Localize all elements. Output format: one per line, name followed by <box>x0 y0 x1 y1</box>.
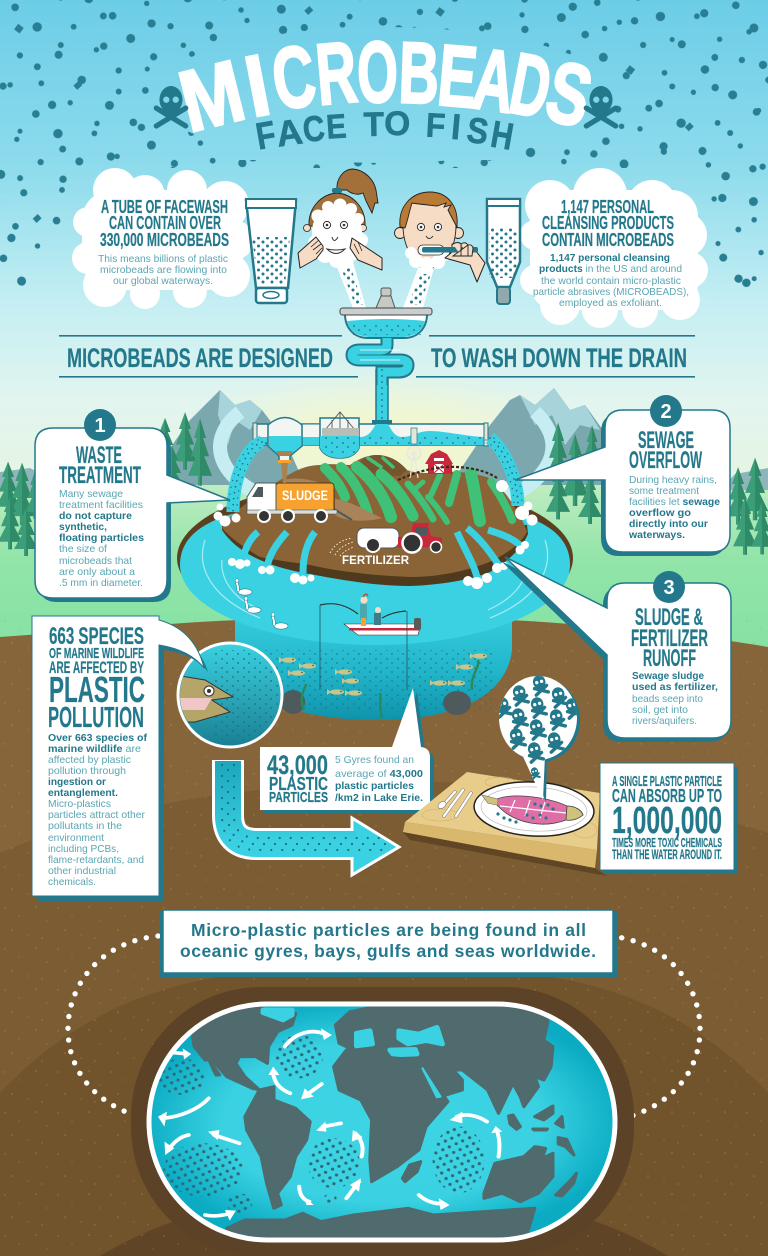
icon: facewash tube left <box>246 199 296 303</box>
panel: waste treatment: 1 <box>94 415 106 437</box>
text: personal cleansing products: 1,147 PERSONAL <box>561 197 654 217</box>
panel: waste treatment: do not capture <box>59 510 132 522</box>
panel: waste treatment: treatment facilities <box>59 499 143 511</box>
text: tube of facewash: CAN CONTAIN OVER <box>109 213 221 233</box>
title: MICROBEADS: I <box>237 36 277 136</box>
panel: waste treatment: .5 mm in diameter. <box>59 577 143 589</box>
text: personal cleansing products: products in the US and around <box>539 263 682 275</box>
text: personal cleansing products: CONTAIN MICROBEADS <box>542 230 674 250</box>
panel: 663 species: including PCBs, <box>48 843 119 855</box>
panel: sewage overflow: waterways. <box>628 529 685 541</box>
text: personal cleansing products <box>533 197 689 309</box>
panel: sewage overflow: OVERFLOW <box>629 447 702 474</box>
land masses <box>192 1007 576 1238</box>
text: tube of facewash: our global waterways. <box>113 275 213 287</box>
panel: sludge and fertilizer runoff: 3 <box>663 577 675 599</box>
text: tube of facewash: This means billions of plastic <box>98 253 228 265</box>
panel: waste treatment: synthetic, <box>59 521 107 533</box>
panel: 663 species: ARE AFFECTED BY <box>49 658 144 677</box>
panel: 663 species: ingestion or <box>48 776 106 788</box>
icon: skull right <box>586 86 616 126</box>
text: tube of facewash <box>98 197 229 287</box>
illustration: fishing boat <box>320 594 421 690</box>
text: personal cleansing products: particle abrasives (MICROBEADS), <box>533 286 689 298</box>
icon: facewash tube right <box>487 199 520 304</box>
panel: 663 species: pollutants in the <box>48 820 122 832</box>
panel: 663 species: POLLUTION <box>48 702 144 734</box>
foam streams running to sink <box>335 262 434 308</box>
panel: waste treatment <box>35 409 230 602</box>
panel: 663 species: Over 663 species of <box>48 732 147 744</box>
panel: 663 species: entanglement. <box>48 787 118 799</box>
title: MICROBEADS: A <box>467 31 521 132</box>
panel: waste treatment: are only about a <box>59 566 135 578</box>
world map <box>149 1004 615 1240</box>
forest <box>0 412 768 556</box>
panel: sewage overflow: SEWAGE <box>638 427 694 454</box>
runoff streams with foam <box>228 528 529 589</box>
panel: 43,000 plastic particles: /km2 in Lake Erie. <box>335 792 423 804</box>
icon: barn <box>425 450 453 474</box>
panel: 43,000 plastic particles: average of 43,000 <box>335 768 423 780</box>
subtitle: FACE TO FISH: I <box>450 108 462 148</box>
panel: 43,000 plastic particles: 5 Gyres found an <box>335 754 414 766</box>
panel: 43,000 plastic particles: PLASTIC <box>269 774 328 794</box>
title: MICROBEADS: R <box>312 24 361 124</box>
cloud: facewash <box>72 168 254 309</box>
illustration: fertilizer tractor <box>330 523 442 567</box>
panel: sewage overflow: some treatment <box>629 485 699 497</box>
drain pipe S-bend <box>352 338 408 423</box>
arrow: water to plate <box>222 760 399 875</box>
panel: 663 species: PLASTIC <box>49 669 145 710</box>
ground <box>0 620 768 1256</box>
mountains <box>0 388 768 492</box>
panel: 663 species <box>32 616 208 901</box>
text: tube of facewash: microbeads are flowing into <box>100 264 227 276</box>
subtitle: FACE TO FISH: C <box>301 109 327 151</box>
fish closeup circle <box>175 643 282 747</box>
panel: sewage overflow <box>515 395 730 556</box>
text: personal cleansing products: employed as exfoliant. <box>559 297 662 309</box>
background: sky <box>0 0 768 510</box>
subtitle: FACE TO FISH: F <box>253 113 279 158</box>
panel: 43,000 plastic particles: plastic particles <box>335 780 414 792</box>
swans <box>235 579 288 629</box>
text: personal cleansing products: CLEANSING PRODUCTS <box>542 213 674 233</box>
text: personal cleansing products: 1,147 personal cleansing <box>550 252 670 264</box>
banner: micro-plastic particles <box>160 910 617 977</box>
underwater bowl <box>235 600 512 720</box>
subtitle: FACE TO FISH: O <box>384 104 411 143</box>
fence <box>398 467 497 480</box>
illustration: girl washing face <box>298 169 382 270</box>
icon: windmill <box>407 446 421 478</box>
dotted orbit around map <box>68 936 700 1117</box>
subtitle: FACE TO FISH: F <box>425 105 446 145</box>
subtitle: FACE TO FISH: S <box>464 110 491 153</box>
cloud: personal cleansing products <box>520 168 708 328</box>
banner: micro-plastic particles: oceanic gyres, bays, gulfs and seas worldwide. <box>180 941 596 961</box>
panel: sludge and fertilizer runoff <box>501 557 731 742</box>
panel: waste treatment: floating particles <box>59 532 144 544</box>
title: MICROBEADS <box>170 24 601 151</box>
panel: waste treatment: WASTE <box>76 442 122 469</box>
treatment plant pipes <box>253 370 488 483</box>
title: MICROBEADS: B <box>397 25 441 123</box>
title: MICROBEADS: O <box>356 24 399 122</box>
illustration: cutting board with fish plate <box>403 772 607 876</box>
panel: 663 species: Micro-plastics <box>48 798 111 810</box>
panel: 663 species: chemicals. <box>48 876 96 888</box>
map halo <box>131 987 634 1256</box>
panel: sewage overflow: During heavy rains, <box>629 474 717 486</box>
icon: skull left <box>156 86 186 126</box>
subtitle: FACE TO FISH <box>253 104 517 159</box>
rivers behind lake <box>220 412 552 504</box>
panel: 663 species: particles attract other <box>48 809 145 821</box>
panel: sludge and fertilizer runoff: rivers/aquifers. <box>632 715 697 727</box>
scattered microbead dots <box>0 0 768 300</box>
panel: sludge and fertilizer runoff: beads seep into <box>632 693 703 705</box>
panel: 1,000,000 times more toxic <box>600 763 738 874</box>
text: tube of facewash: A TUBE OF FACEWASH <box>101 197 228 217</box>
panel: 663 species: environment <box>48 832 104 844</box>
text: personal cleansing products: the world contain micro-plastic <box>541 275 681 287</box>
panel: 663 species: marine wildlife are <box>48 743 141 755</box>
panel: waste treatment: TREATMENT <box>59 462 141 489</box>
title: MICROBEADS: M <box>170 42 254 151</box>
panel: 43,000 plastic particles: 43,000 <box>267 750 328 780</box>
subtitle: FACE TO FISH: E <box>325 107 348 146</box>
illustration: fertilizer tractor: FERTILIZER <box>342 555 410 567</box>
current arrows <box>163 1032 499 1216</box>
heading rules <box>59 335 695 378</box>
title: MICROBEADS: S <box>537 42 601 147</box>
title: MICROBEADS: E <box>434 26 481 126</box>
panel: sludge and fertilizer runoff: soil, get into <box>632 704 688 716</box>
panel: sewage overflow: overflow go <box>629 507 691 519</box>
panel: waste treatment: microbeads that <box>59 555 132 567</box>
inland seas <box>263 1010 442 1097</box>
title: MICROBEADS: D <box>503 35 559 138</box>
illustration: sink with faucet <box>340 288 432 338</box>
subtitle: FACE TO FISH: T <box>363 106 385 144</box>
banner: micro-plastic particles: Micro-plastic particles are being found in all <box>191 920 586 940</box>
panel: 663 species: flame-retardants, and <box>48 854 144 866</box>
panel: waste treatment: Many sewage <box>59 488 123 500</box>
panel: sewage overflow: facilities let sewage <box>629 496 720 508</box>
subtitle: FACE TO FISH: A <box>274 111 305 155</box>
subtitle: FACE TO FISH: H <box>488 113 517 159</box>
lake <box>177 480 573 645</box>
panel: sewage overflow: directly into our <box>629 518 708 530</box>
panel: sludge and fertilizer runoff: used as fertilizer, <box>632 681 718 693</box>
panel: 663 species: OF MARINE WILDLIFE <box>49 645 144 662</box>
panel: 663 species: affected by plastic <box>48 754 131 766</box>
illustration: sludge truck: SLUDGE <box>282 488 328 503</box>
illustration: sludge truck <box>247 483 352 522</box>
panel: 663 species: pollution through <box>48 765 126 777</box>
title: MICROBEADS: C <box>266 26 321 129</box>
panel: sludge and fertilizer runoff: Sewage sludge <box>632 670 704 682</box>
panel: sludge and fertilizer runoff: FERTILIZER <box>631 625 708 652</box>
panel: sewage overflow: 2 <box>660 401 672 423</box>
illustration: boy brushing teeth <box>394 192 485 282</box>
overflow waterfalls <box>214 438 538 526</box>
panel: 663 species: 663 SPECIES <box>49 623 144 650</box>
text: tube of facewash: 330,000 MICROBEADS <box>100 230 229 250</box>
panel: 663 species: other industrial <box>48 865 116 877</box>
panel: sludge and fertilizer runoff: RUNOFF <box>643 645 696 672</box>
heading: microbeads are designed: MICROBEADS ARE DESIGNED <box>67 343 333 373</box>
speech bubble: skulls <box>494 674 581 802</box>
grass field <box>0 478 768 660</box>
panel: sludge and fertilizer runoff: SLUDGE & <box>635 604 703 631</box>
garbage patch dots <box>158 1035 485 1213</box>
panel: waste treatment: the size of <box>59 543 107 555</box>
island with farm fields <box>222 455 528 586</box>
panel: 43,000 plastic particles <box>260 688 434 814</box>
panel: 43,000 plastic particles: PARTICLES <box>269 789 328 806</box>
